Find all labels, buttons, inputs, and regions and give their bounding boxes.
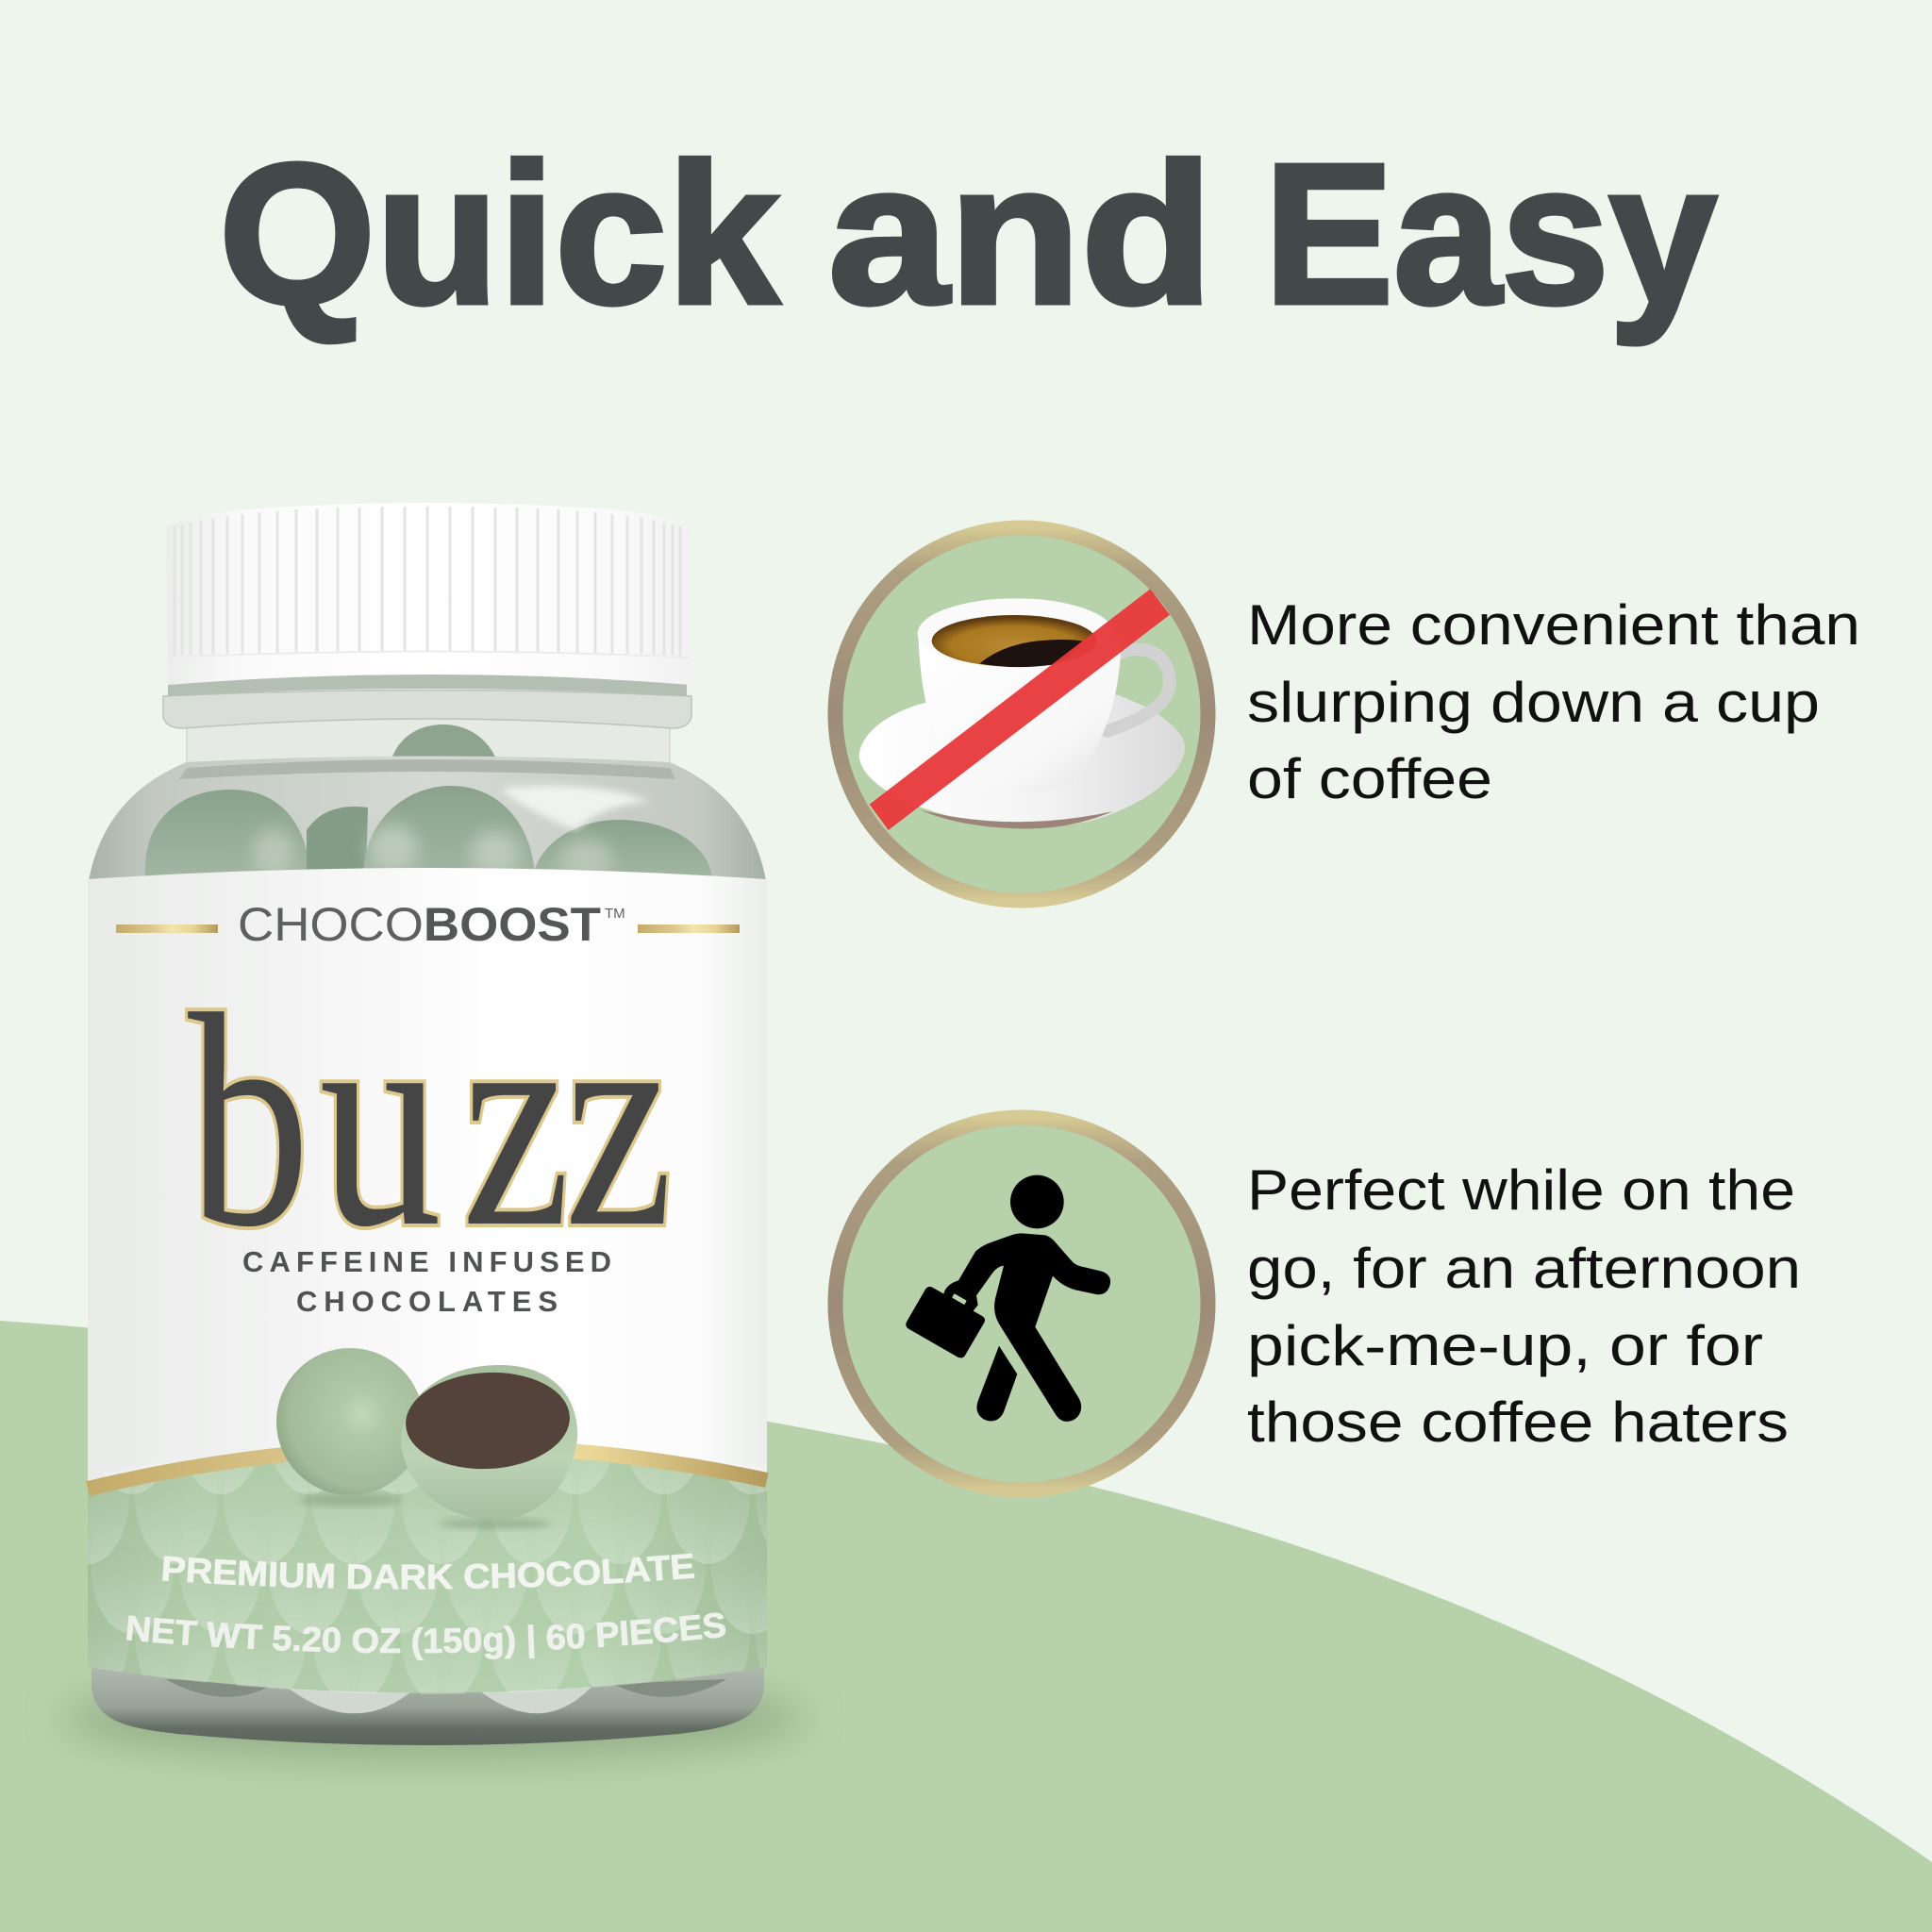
product: bottle of buzz chocolates (64, 503, 804, 1774)
coffee crema (932, 615, 1096, 667)
title (219, 122, 1717, 345)
head (1010, 1175, 1064, 1228)
screw cap (166, 503, 691, 685)
glass highlight (500, 786, 651, 830)
label text weight: NET WT 5.20 OZ (150g) | 60 PIECES (126, 1613, 726, 1660)
chocolates inside the glass (145, 786, 712, 881)
text: perfect while on the go: go, for an afternoon (1247, 1237, 1801, 1300)
glass neck shelf band (179, 759, 675, 779)
product name buzz: buzz (188, 953, 673, 1291)
cap lower band shade (168, 651, 690, 658)
briefcase handle gap (952, 1293, 967, 1305)
base of the bottle (92, 1660, 764, 1745)
whole chocolate (276, 1348, 424, 1507)
icon ring (836, 1117, 1208, 1491)
icon ring (836, 528, 1208, 900)
trademark: TM (605, 906, 625, 922)
bottle shadow (61, 1679, 807, 1758)
text: more convenient than coffee: of coffee (1247, 747, 1492, 810)
back leg (976, 1346, 1017, 1421)
cup rim (918, 598, 1114, 669)
coffee cup and saucer (859, 589, 1185, 830)
glass neck (187, 717, 670, 769)
handle (1107, 649, 1170, 731)
neck ring (163, 691, 691, 728)
title: and (828, 122, 1213, 345)
red prohibition bar (870, 589, 1170, 830)
brand name: CHOCOBOOST (238, 898, 601, 951)
title: Quick (219, 122, 780, 345)
label green band (88, 1449, 767, 1692)
briefcase (906, 1287, 985, 1357)
text: perfect while on the go: pick-me-up, or for (1247, 1314, 1763, 1377)
thread band (168, 674, 687, 696)
text: more convenient than coffee: More convenient than (1247, 593, 1860, 657)
text: more convenient than coffee (1247, 593, 1860, 810)
coffee surface (979, 640, 1085, 667)
glass shoulder (88, 757, 767, 887)
icon: no coffee (836, 528, 1208, 900)
label white area (88, 868, 767, 1509)
subtitle line 2: CHOCOLATES (296, 1285, 558, 1318)
person figure (906, 1175, 1110, 1422)
gold dash right (638, 924, 740, 933)
top chocolate in neck (389, 724, 499, 768)
halved chocolate (401, 1365, 577, 1529)
chocolates in base (165, 1679, 726, 1713)
icon: walking person with briefcase (836, 1117, 1208, 1491)
text: more convenient than coffee: slurping down a cup (1247, 671, 1820, 734)
gold arc band (88, 1446, 767, 1489)
saucer (859, 695, 1185, 827)
label text premium: PREMIUM DARK CHOCOLATE (162, 1553, 694, 1590)
cup body (918, 635, 1121, 795)
label scale pattern (88, 1458, 767, 1694)
title: Easy (1264, 122, 1717, 345)
saucer underside (920, 809, 1113, 828)
torso, arms and front leg (943, 1233, 1110, 1422)
text: perfect while on the go: Perfect while on the (1247, 1158, 1795, 1222)
gold dash left (116, 924, 218, 933)
text: perfect while on the go: those coffee haters (1247, 1391, 1789, 1454)
subtitle line 1: CAFFEINE INFUSED (242, 1245, 611, 1278)
green curved ground shape (0, 1321, 1932, 1932)
text: perfect while on the go (1247, 1158, 1801, 1454)
cap ribs (175, 507, 680, 656)
